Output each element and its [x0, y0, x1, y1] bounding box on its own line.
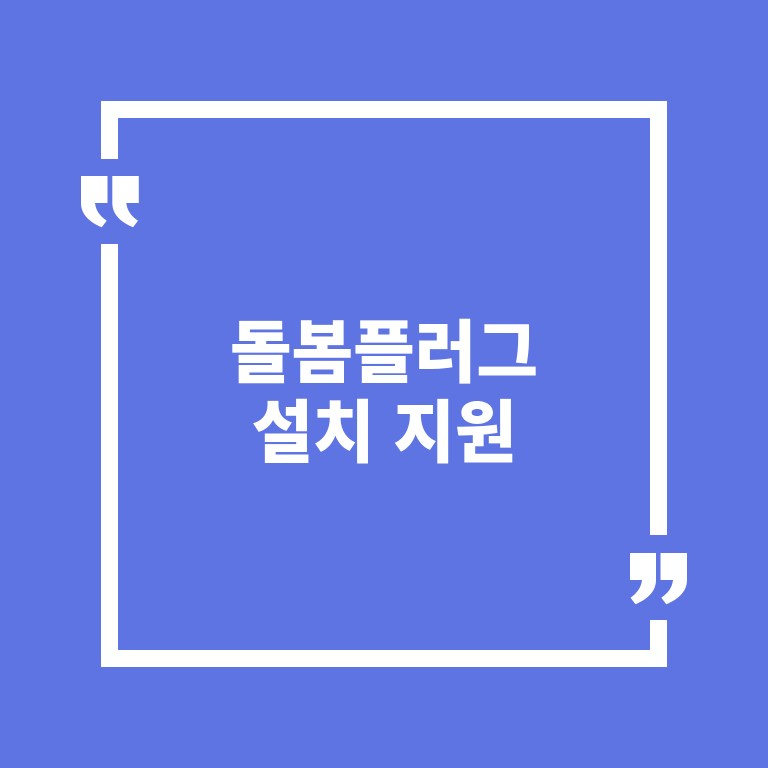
white frame with gaps [110, 110, 658, 658]
title [230, 316, 538, 472]
icon: opening quotation mark [81, 176, 139, 227]
title: 돌봄플러그 [230, 316, 538, 392]
icon: closing quotation mark [630, 553, 687, 604]
title: 설치 지원 [251, 396, 517, 472]
